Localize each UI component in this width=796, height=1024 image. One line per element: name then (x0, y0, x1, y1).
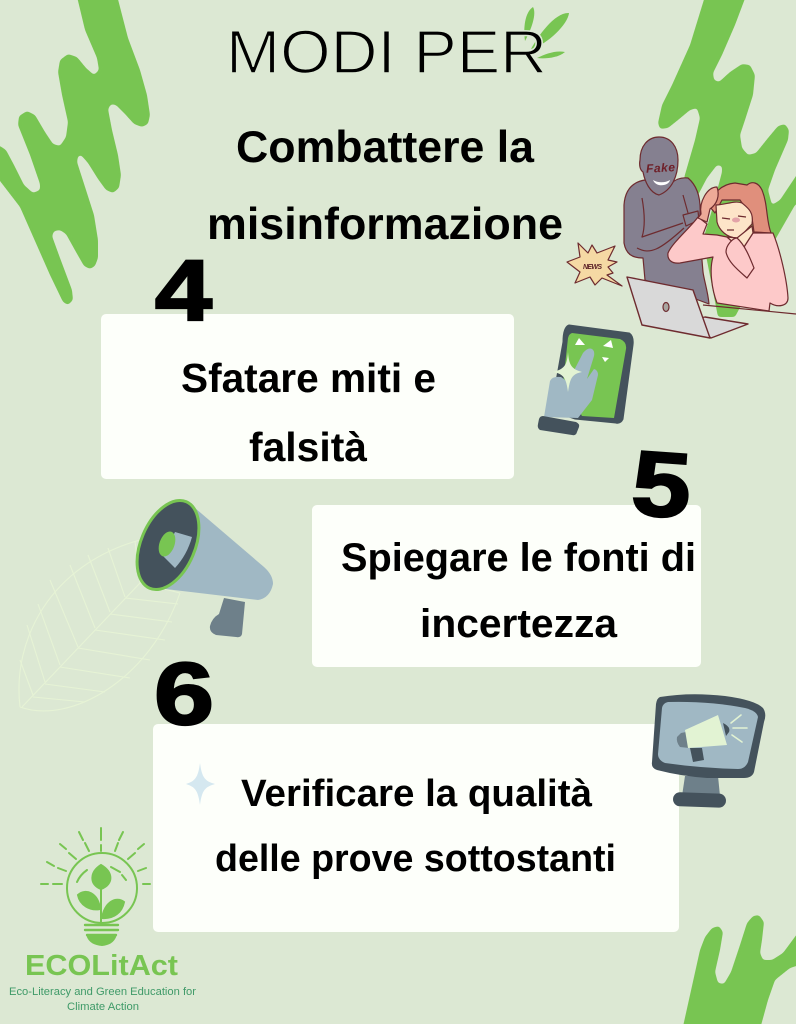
heading: Combattere la misinformazione (207, 123, 563, 249)
decorative blob: bottom right (680, 915, 796, 1024)
icon: tablet with hand (538, 326, 632, 435)
number 6: 6 (154, 644, 214, 743)
icon: monitor with megaphone (652, 694, 765, 808)
face details (722, 216, 746, 230)
heading: Combattere la misinformazione: misinformazione (207, 200, 563, 249)
panel: step 5 (312, 505, 701, 667)
logo wordmark: ECOLitAct (25, 950, 178, 982)
woman face (716, 202, 752, 238)
sparkle (186, 763, 215, 805)
man arm (637, 195, 688, 251)
woman sweater (668, 217, 788, 311)
title: MODI PER: MODI PER (226, 18, 547, 86)
step 5 text: Spiegare le fonti di (341, 536, 696, 580)
step 6 text: Verificare la qualità (241, 772, 593, 815)
logo bulb icon (41, 828, 150, 945)
woman hand on head (698, 187, 718, 222)
logo tagline: Eco-Literacy and Green Education for (9, 986, 196, 998)
step 6 text: delle prove sottostanti (215, 837, 616, 880)
fake label: Fake (646, 160, 676, 176)
step 4 text: Sfatare miti e (181, 355, 436, 401)
decorative blob: top right (658, 0, 796, 317)
heading: Combattere la misinformazione: Combattere la (236, 123, 535, 172)
illustration: fake news scene (567, 137, 796, 338)
step 5 text (341, 536, 696, 646)
icon: megaphone (125, 491, 273, 637)
woman hair back (710, 183, 771, 233)
panel: step 6 (153, 724, 679, 932)
step 4 text (181, 355, 436, 470)
logo tagline: Climate Action (67, 1001, 139, 1013)
decorative sprig behind title (524, 7, 569, 58)
number 4: 4 (155, 243, 212, 339)
logo: ECOLitAct (9, 828, 196, 1013)
step 6 text (215, 772, 616, 880)
step 5 text: incertezza (420, 602, 618, 646)
laptop (690, 317, 748, 338)
panel: step 4 (101, 314, 514, 479)
woman hand at chin (726, 238, 754, 278)
number 5: 5 (629, 432, 694, 538)
step 4 text: falsità (249, 424, 367, 470)
woman neck (727, 226, 753, 250)
man body (624, 178, 709, 304)
smile (653, 180, 670, 185)
man head (640, 137, 678, 195)
illustration: fake news scene: NEWS (583, 264, 602, 271)
decorative blob: top left (0, 0, 150, 305)
table line (703, 305, 796, 314)
news burst (567, 243, 622, 286)
decorative leaf outline (19, 540, 180, 711)
logo tagline (9, 986, 196, 1013)
